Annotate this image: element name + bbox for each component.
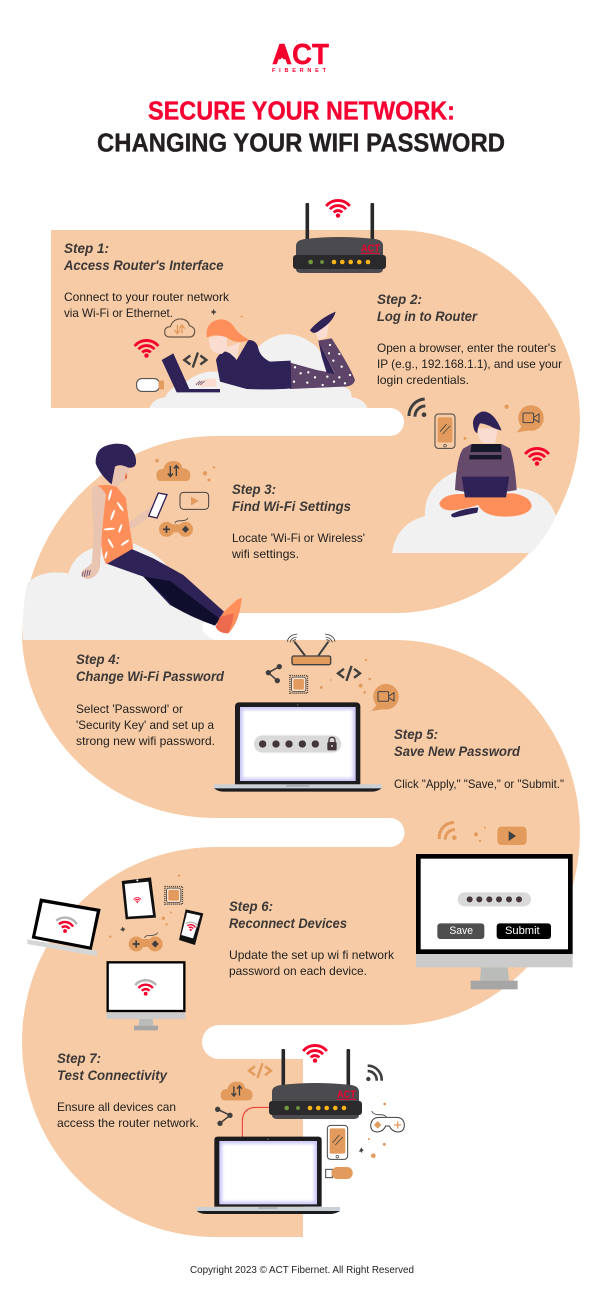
- text: step 1: [63, 240, 230, 320]
- icon: red wifi beside woman: [135, 340, 158, 358]
- illustration: router connected to laptop with icons: [197, 1063, 404, 1214]
- icon: lower router: [269, 1049, 362, 1119]
- illustration: monitor with save and submit buttons: [416, 822, 573, 989]
- title: CHANGING YOUR WIFI PASSWORD: [97, 130, 505, 158]
- icon: top router: [293, 203, 386, 273]
- illustration: connected devices with wifi: [27, 874, 203, 1030]
- text: step 2: [377, 291, 562, 387]
- text: step 7: Ensure all devices can: [57, 1100, 176, 1114]
- text: step 6: Reconnect Devices: [229, 915, 347, 931]
- text: step 2: login credentials.: [377, 373, 469, 387]
- copyright footer: Copyright 2023 © ACT Fibernet. All Right Reserved: [190, 1265, 414, 1276]
- text: step 1: Step 1:: [64, 240, 109, 256]
- illustration: woman lying on cloud with laptop: [137, 309, 367, 408]
- illustration: monitor with save and submit buttons: Save: [449, 925, 473, 937]
- text: step 2: Open a browser, enter the router's: [377, 341, 556, 355]
- text: step 3: [231, 481, 365, 561]
- icon: wifi above router: [326, 200, 350, 218]
- title: SECURE YOUR NETWORK:: [148, 98, 455, 126]
- text: step 3: Step 3:: [232, 481, 276, 497]
- illustration: man on cloud with laptop: [392, 399, 556, 553]
- text: step 2: IP (e.g., 192.168.1.1), and use your: [377, 357, 562, 371]
- text: step 1: Connect to your router network: [64, 290, 230, 304]
- text: step 7: Test Connectivity: [57, 1067, 168, 1083]
- logo: FIBERNET: [272, 68, 327, 74]
- icon: red wifi near man: [525, 448, 549, 466]
- text: step 7: Step 7:: [57, 1050, 101, 1066]
- text: step 3: wifi settings.: [231, 547, 299, 561]
- text: step 5: [394, 726, 564, 791]
- text: step 1: Access Router's Interface: [63, 257, 224, 273]
- text: step 5: Step 5:: [394, 726, 438, 742]
- illustration: woman sitting on cloud with phone: [23, 444, 242, 640]
- text: step 6: [229, 898, 395, 978]
- text: step 6: password on each device.: [229, 964, 367, 978]
- icon: wifi above lower router: [303, 1045, 327, 1063]
- illustration: monitor with save and submit buttons: Submit: [505, 925, 540, 937]
- text: step 4: 'Security Key' and set up a: [76, 718, 214, 732]
- text: step 6: Step 6:: [229, 898, 273, 914]
- text: step 2: Log in to Router: [377, 308, 478, 324]
- text: step 3: Find Wi-Fi Settings: [232, 498, 351, 514]
- illustration: network icons and laptop with password field: [214, 634, 399, 792]
- icon: video bubble near man: [516, 405, 544, 432]
- text: step 7: access the router network.: [57, 1116, 199, 1130]
- logo: ACT: [272, 39, 329, 71]
- text: step 1: via Wi-Fi or Ethernet.: [64, 306, 173, 320]
- text: step 5: Click "Apply," "Save," or "Submit.": [394, 777, 564, 791]
- text: step 5: Save New Password: [394, 743, 520, 759]
- text: step 4: strong new wifi password.: [76, 734, 215, 748]
- text: step 3: Locate 'Wi-Fi or Wireless': [232, 531, 365, 545]
- background: winding peach path: [22, 230, 580, 1237]
- text: step 4: Step 4:: [76, 651, 120, 667]
- text: step 4: [76, 651, 224, 748]
- text: step 4: Select 'Password' or: [76, 702, 183, 716]
- text: step 7: [57, 1050, 199, 1130]
- title: [97, 98, 505, 158]
- text: step 4: Change Wi-Fi Password: [76, 668, 224, 684]
- text: step 2: Step 2:: [377, 291, 422, 307]
- text: step 6: Update the set up wi fi network: [229, 948, 395, 962]
